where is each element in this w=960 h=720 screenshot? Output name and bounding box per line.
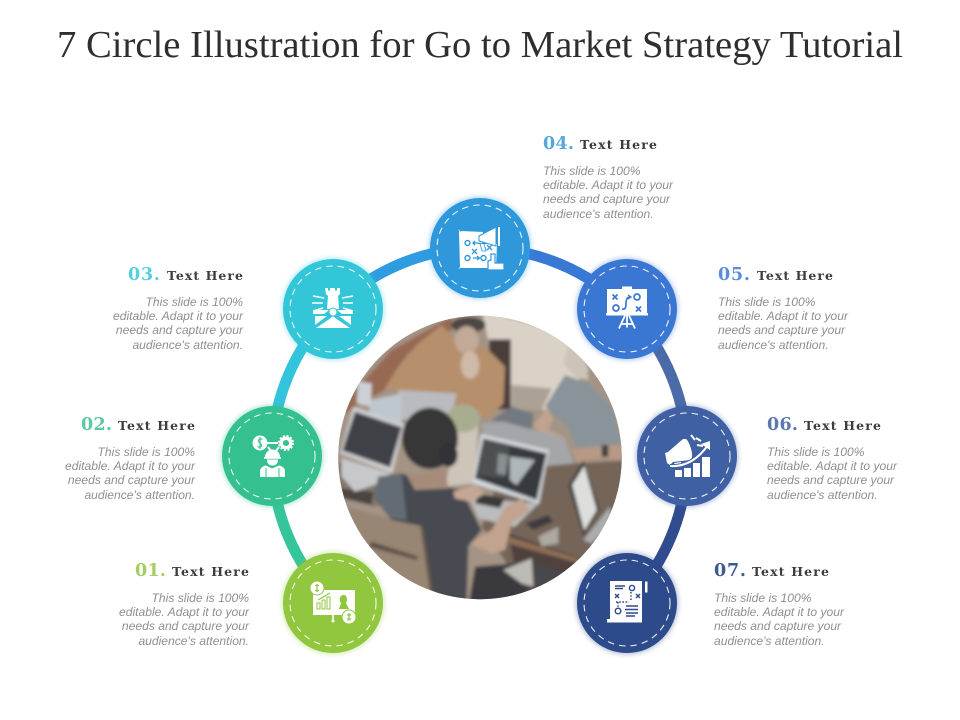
label 03: Text Here [167,268,243,283]
body text 06: editable. Adapt it to your [767,459,898,473]
label 06: 06. [767,415,798,435]
label 07: 07. [714,561,746,581]
body text 01: audience's attention. [138,634,249,648]
label 01: 01. [135,561,166,581]
body text 07: editable. Adapt it to your [714,605,845,619]
body text 05: needs and capture your [718,323,846,337]
body text 02: needs and capture your [68,473,196,487]
label 01: Text Here [172,564,249,579]
icon: plan document scroll [607,581,648,622]
node 03: cyan circle [282,258,384,360]
body text 04: editable. Adapt it to your [543,178,674,192]
node 06: slate blue circle [636,404,738,508]
body text 01 [119,591,250,648]
label 04 [543,134,674,221]
body text 03 [113,295,244,352]
body text 03: editable. Adapt it to your [113,309,244,323]
body text 05: This slide is 100% [718,295,816,309]
icon: worker with coin and gear [252,436,293,477]
body text 06: audience's attention. [767,488,878,502]
icon: presentation board with coins [310,581,356,624]
body text 04 [543,164,674,221]
body text 01: editable. Adapt it to your [119,605,250,619]
body text 04: needs and capture your [543,192,671,206]
label 04: 04. [543,134,574,154]
icon: megaphone with growth bars [665,435,710,477]
label 02: Text Here [118,418,195,433]
body text 03: This slide is 100% [146,295,243,309]
body text 05: audience's attention. [718,338,829,352]
body text 04: This slide is 100% [543,164,641,178]
body text 06 [767,445,898,502]
icon: castle tower with rays [312,288,353,328]
label 03: 03. [128,265,160,285]
label 07 [714,561,845,648]
body text 01: needs and capture your [122,619,250,633]
label 02: 02. [81,415,112,435]
node 07: navy circle [576,552,678,654]
icon: strategy map with megaphone [458,227,504,270]
label 04: Text Here [580,137,657,152]
label 05 [718,265,849,352]
node 05: royal blue circle [576,258,678,360]
body text 02 [65,445,196,502]
body text 07: needs and capture your [714,619,842,633]
body text 05: editable. Adapt it to your [718,309,849,323]
body text 03: audience's attention. [132,338,243,352]
label 06: Text Here [804,418,881,433]
body text 07: audience's attention. [714,634,825,648]
label 05: 05. [718,265,750,285]
body text 02: This slide is 100% [98,445,195,459]
body text 01: This slide is 100% [152,591,249,605]
icon: tactics board on easel [606,286,648,328]
body text 07: This slide is 100% [714,591,812,605]
label 03 [113,265,244,352]
body text 02: audience's attention. [84,488,195,502]
node 01: green circle [282,552,384,654]
body text 06: This slide is 100% [767,445,865,459]
body text 03: needs and capture your [116,323,244,337]
central team photo [335,310,630,607]
title: 7 Circle Illustration for Go to Market Strategy Tutorial [57,24,903,66]
body text 06: needs and capture your [767,473,895,487]
label 07: Text Here [752,564,829,579]
body text 05 [718,295,849,352]
node 04: blue circle [428,196,532,300]
connecting ring arcs [272,248,687,603]
body text 02: editable. Adapt it to your [65,459,196,473]
node 02: teal green circle [220,404,324,508]
label 06 [767,415,898,502]
body text 04: audience's attention. [543,207,654,221]
label 02 [65,415,196,502]
label 01 [119,561,250,648]
label 05: Text Here [757,268,833,283]
body text 07 [714,591,845,648]
